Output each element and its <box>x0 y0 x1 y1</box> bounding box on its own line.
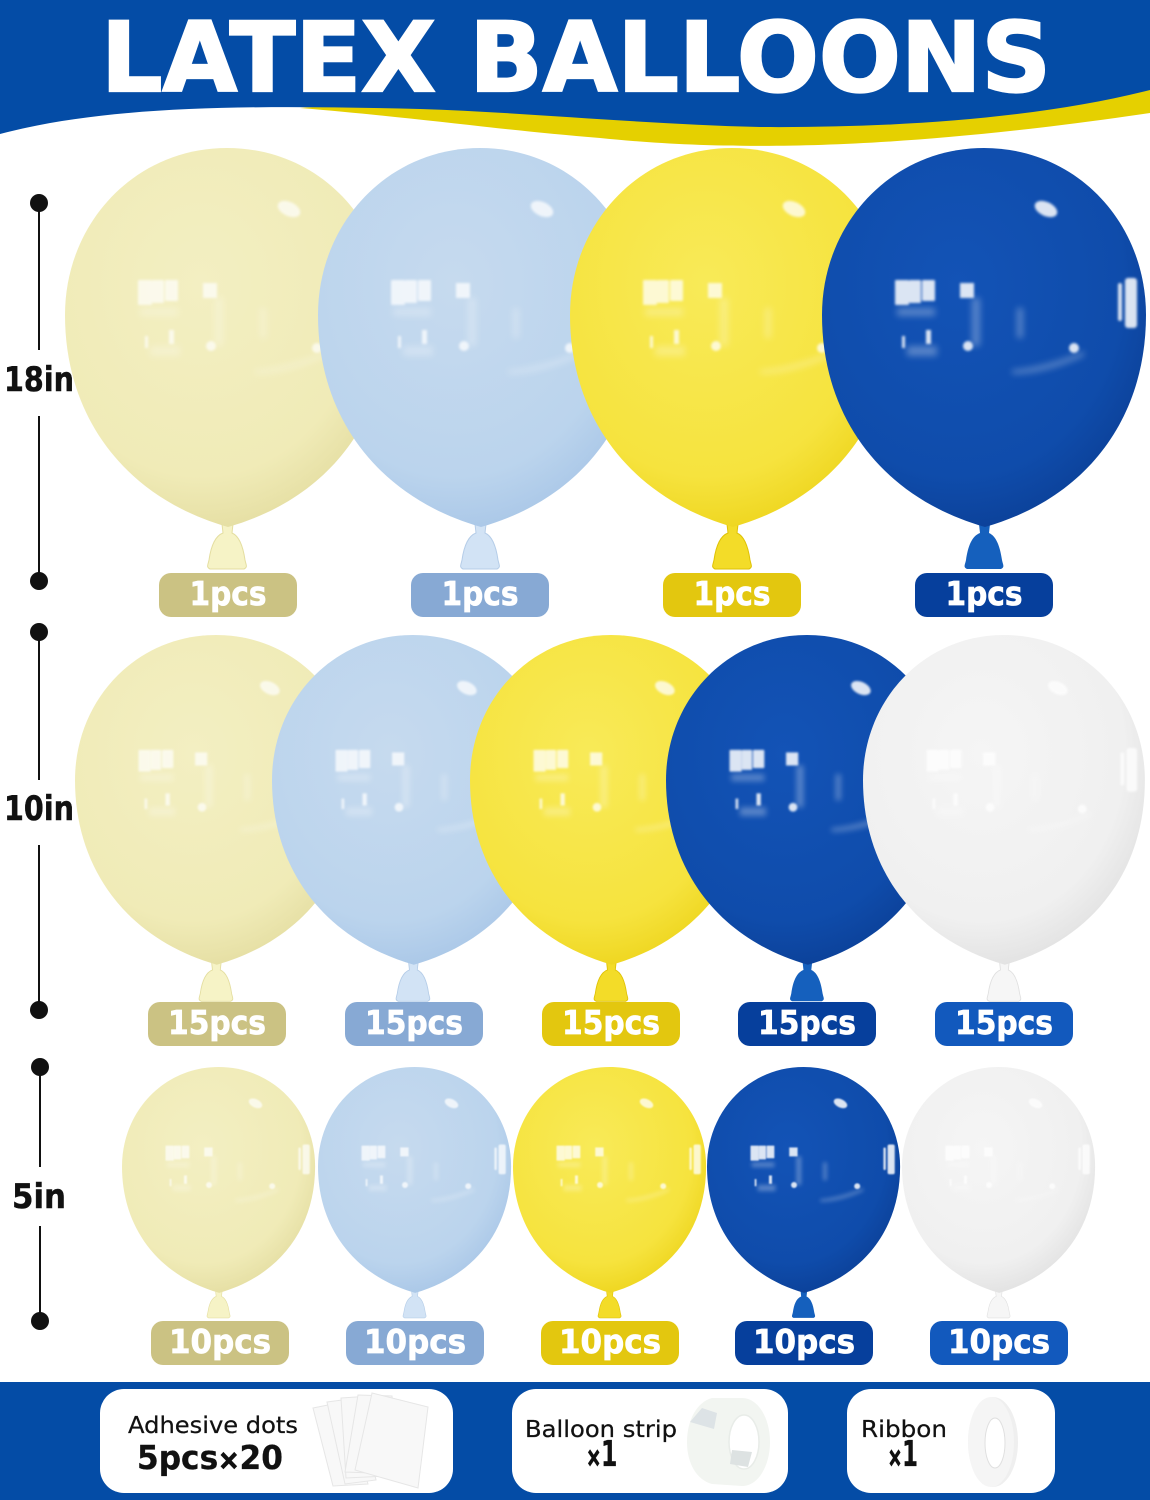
card: adhesive dots: Adhesive dots <box>128 1413 298 1439</box>
row: 5in quantity labels: 10pcs <box>364 1322 466 1361</box>
row: 18in balloons <box>65 148 1146 569</box>
balloon: white 10in <box>863 635 1145 1001</box>
card: adhesive dots: 5pcs×20 <box>137 1438 283 1477</box>
card: balloon strip: Balloon strip <box>525 1417 677 1443</box>
card: ribbon: Ribbon <box>861 1417 947 1443</box>
balloon: cream 5in <box>122 1067 315 1318</box>
balloon: navy 18in <box>822 148 1146 569</box>
row: 10in quantity labels: 15pcs <box>168 1003 266 1042</box>
accessories band <box>0 1382 1150 1500</box>
icon: balloon strip tape roll <box>687 1398 770 1486</box>
card: adhesive dots <box>100 1389 453 1493</box>
row: 10in balloons <box>75 635 1145 1001</box>
row: 18in quantity labels: 1pcs <box>442 574 518 613</box>
row: 18in quantity labels <box>159 573 1053 617</box>
balloon: navy 10in <box>666 635 948 1001</box>
balloon: yellow 18in <box>570 148 894 569</box>
row: 5in quantity labels: 10pcs <box>559 1322 661 1361</box>
card: balloon strip: ×1 <box>586 1434 618 1475</box>
balloon: light blue 18in <box>318 148 642 569</box>
card: balloon strip <box>512 1389 788 1493</box>
row: 18in quantity labels: 1pcs <box>946 574 1022 613</box>
title: LATEX BALLOONS <box>101 2 1051 114</box>
row: 10in quantity labels: 15pcs <box>955 1003 1053 1042</box>
icon: ribbon roll <box>968 1397 1018 1487</box>
card: ribbon: ×1 <box>888 1434 918 1475</box>
row: 18in quantity labels: 1pcs <box>694 574 770 613</box>
row: 5in quantity labels: 10pcs <box>169 1322 271 1361</box>
10in size ruler <box>4 623 74 1019</box>
icon: adhesive sheets <box>313 1393 428 1488</box>
row: 10in quantity labels: 15pcs <box>562 1003 660 1042</box>
balloon: yellow 10in <box>470 635 752 1001</box>
row: 5in quantity labels: 10pcs <box>948 1322 1050 1361</box>
5in size ruler: 5in <box>12 1177 66 1217</box>
row: 18in quantity labels: 1pcs <box>190 574 266 613</box>
balloon: cream 18in <box>65 148 389 569</box>
balloon: cream 10in <box>75 635 357 1001</box>
18in size ruler <box>4 194 74 590</box>
10in size ruler: 10in <box>4 789 74 829</box>
row: 5in quantity labels: 10pcs <box>753 1322 855 1361</box>
row: 10in quantity labels: 15pcs <box>758 1003 856 1042</box>
5in size ruler <box>12 1058 66 1330</box>
balloon: light blue 5in <box>318 1067 511 1318</box>
balloon: white 5in <box>902 1067 1095 1318</box>
balloon: yellow 5in <box>513 1067 706 1318</box>
balloon: navy 5in <box>707 1067 900 1318</box>
row: 10in quantity labels: 15pcs <box>365 1003 463 1042</box>
balloon: light blue 10in <box>272 635 554 1001</box>
card: ribbon <box>847 1389 1055 1493</box>
row: 5in balloons <box>122 1067 1095 1318</box>
row: 5in quantity labels <box>151 1321 1068 1365</box>
row: 10in quantity labels <box>148 1002 1073 1046</box>
header banner <box>0 0 1150 146</box>
18in size ruler: 18in <box>4 360 74 400</box>
